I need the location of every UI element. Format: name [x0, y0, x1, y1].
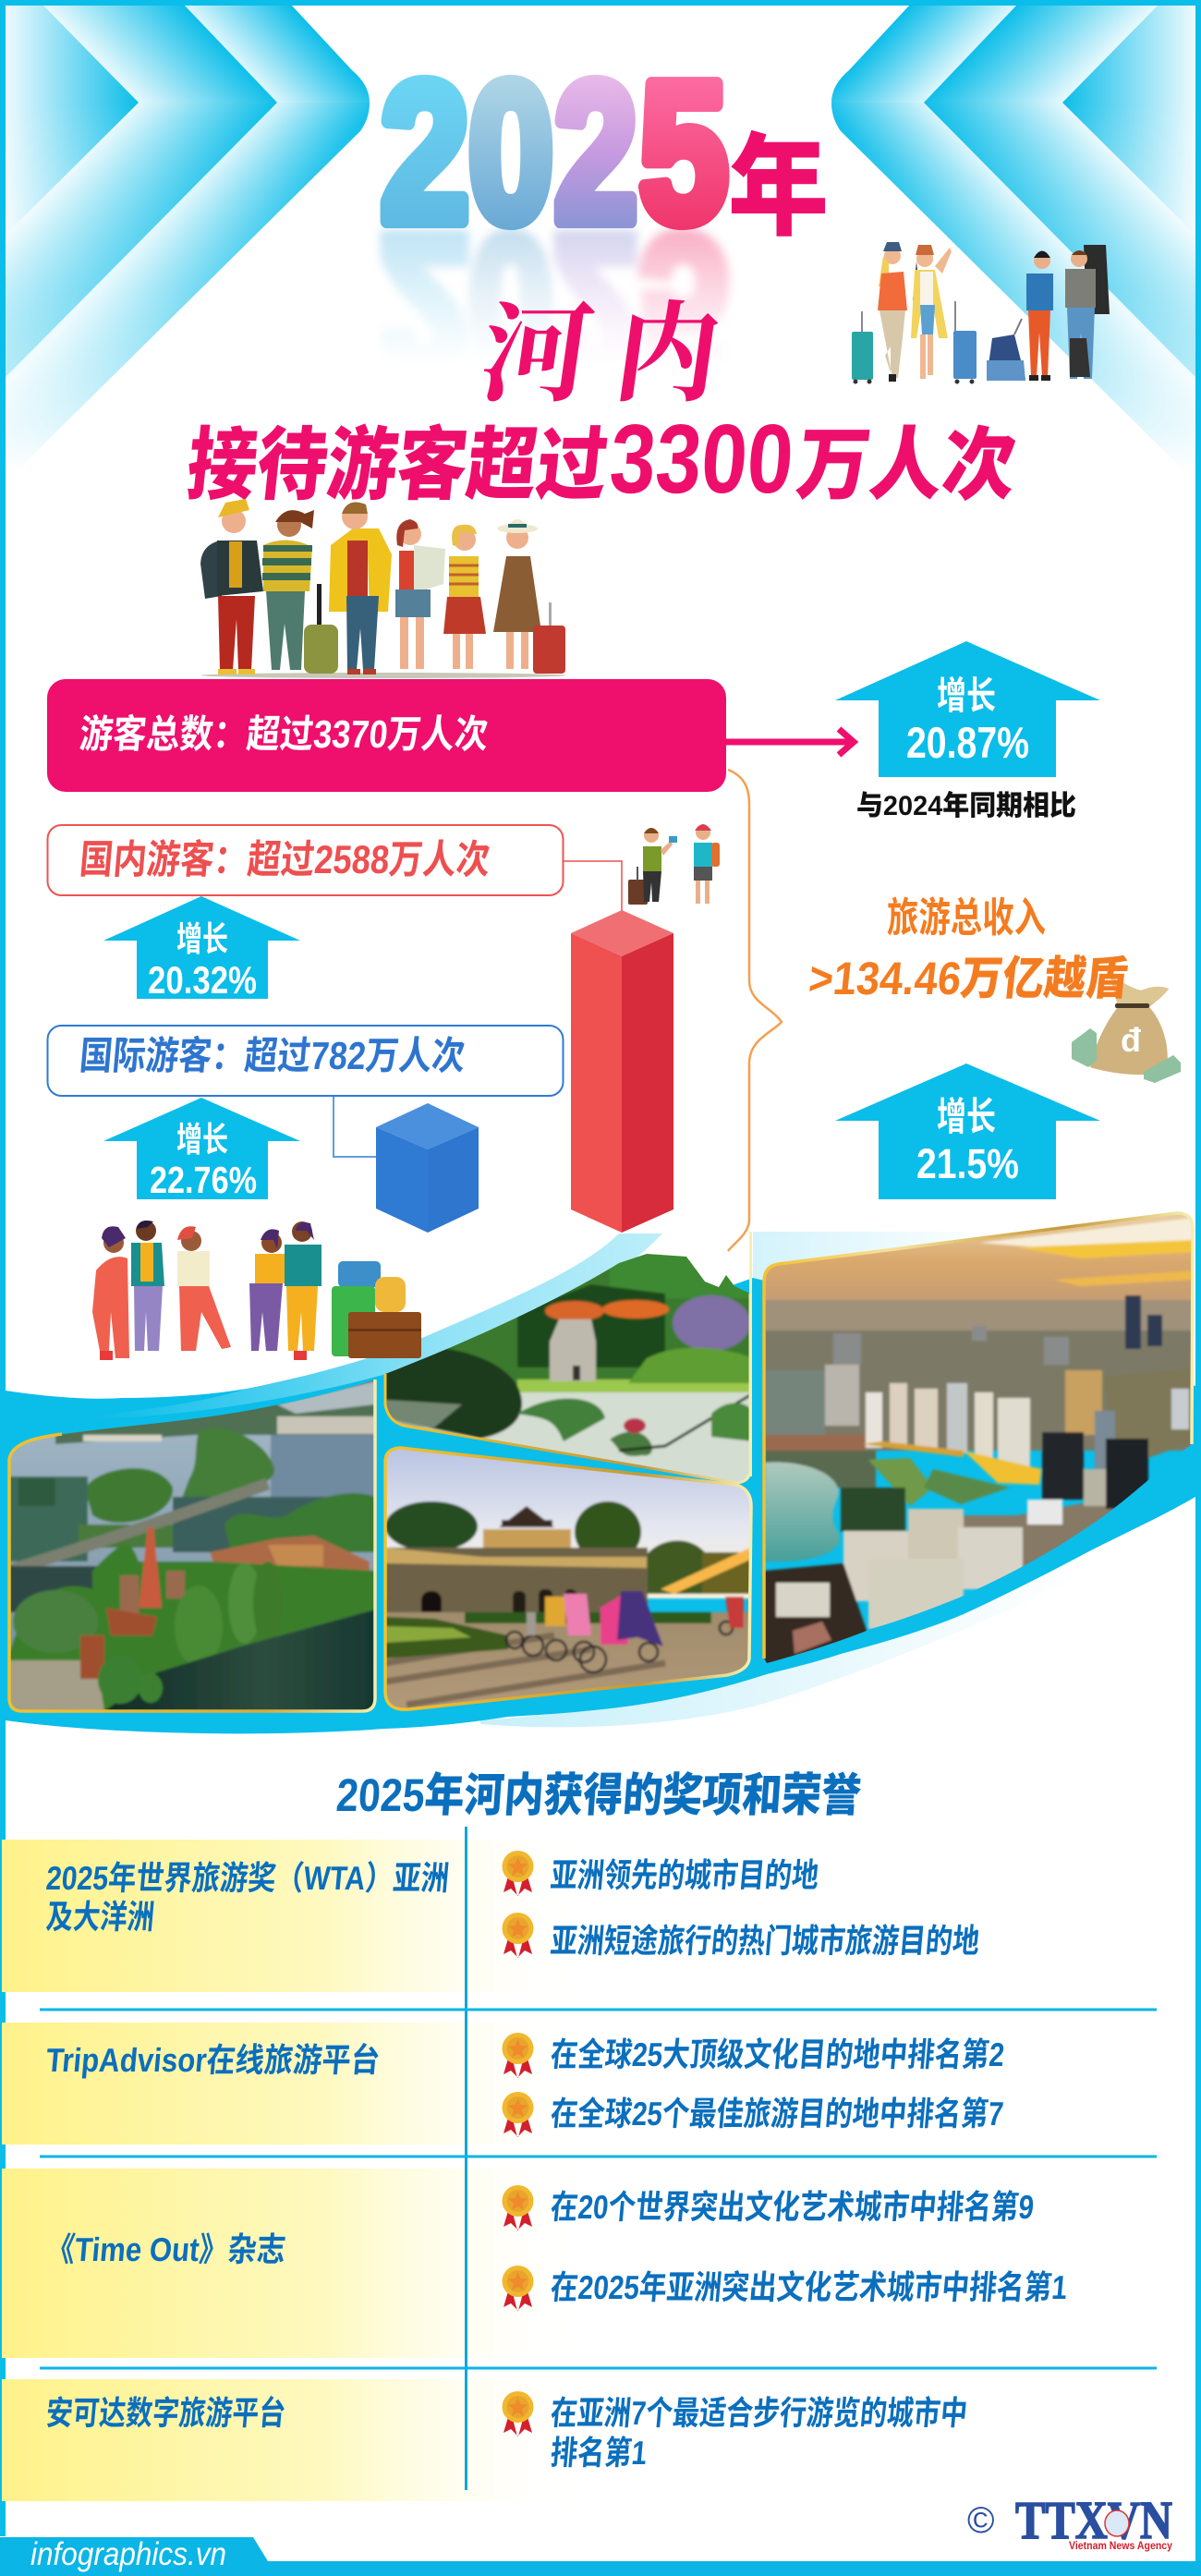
logo TTXVN: TTXVN	[1015, 2490, 1172, 2550]
photo: Tran Quoc pagoda on West Lake	[7, 1377, 377, 1714]
panel: domestic visitors	[48, 825, 564, 895]
connector blue	[334, 1096, 376, 1157]
growth arrow: international	[103, 1098, 300, 1201]
growth arrow: total visitors: 增长	[937, 674, 996, 717]
illustration: two tourists	[628, 824, 720, 905]
chevron decoration left	[6, 5, 370, 482]
awards heading: 2025年河内获得的奖项和荣誉	[334, 1769, 863, 1821]
comparison note: 与2024年同期相比	[856, 791, 1076, 821]
pale swoosh upper	[49, 1233, 662, 1419]
pale swoosh lower	[480, 1497, 1195, 1727]
title year 2025: 5	[639, 41, 728, 263]
main headline: 万人次	[793, 421, 1020, 510]
yellow row backgrounds	[2, 1840, 593, 2501]
award row 4: 排名第1	[549, 2434, 649, 2472]
revenue label: 旅游总收入	[887, 895, 1046, 941]
title year 2025: 2	[554, 41, 637, 263]
icon: money bag	[1072, 978, 1181, 1083]
growth arrow: domestic: 增长	[176, 920, 228, 958]
title Hanoi calligraphy: 河	[472, 267, 603, 423]
award row 2: 在全球25个最佳旅游目的地中排名第7	[549, 2095, 1005, 2132]
award row 3: 《Time Out》杂志	[44, 2230, 287, 2268]
reflection of the year: 2	[554, 195, 637, 418]
table column divider	[465, 1827, 467, 2490]
photo: Thang Long citadel with cyclists	[383, 1446, 753, 1719]
bar: international cube	[376, 1103, 479, 1233]
title year 2025: 0	[468, 41, 553, 263]
blue swoosh band	[6, 1278, 1195, 1733]
panel: total visitors	[47, 679, 726, 792]
growth arrow: international: 增长	[176, 1121, 228, 1159]
title Hanoi calligraphy: 内	[607, 267, 731, 423]
growth arrow: international: 22.76%	[150, 1159, 257, 1201]
award row 1: 2025年世界旅游奖（WTA）亚洲	[44, 1859, 451, 1897]
reflection of the year: 5	[639, 195, 728, 418]
award row 2: TripAdvisor在线旅游平台	[44, 2041, 382, 2079]
icon: money bag: đ	[1121, 1021, 1141, 1059]
growth arrow: domestic: 20.32%	[148, 958, 257, 1002]
illustration: tourists with luggage	[92, 1221, 421, 1360]
panel: domestic visitors: 国内游客：超过2588万人次	[78, 838, 491, 882]
footer source: infographics.vn	[30, 2536, 226, 2572]
panel: international visitors	[48, 1026, 564, 1096]
reflection of the year: 0	[468, 195, 553, 418]
award row 1	[44, 1851, 981, 1960]
growth arrow: revenue: 21.5%	[916, 1140, 1019, 1187]
pale vertical line right of the centre photos	[749, 1232, 752, 1476]
award row 2	[44, 2033, 1006, 2137]
photo: Turtle Tower on Hoan Kiem Lake	[383, 1238, 753, 1488]
title year 2025: 2	[381, 41, 469, 263]
table row dividers	[40, 2010, 1157, 2368]
growth arrow: revenue: 增长	[937, 1095, 996, 1138]
panel: total visitors: 游客总数：超过3370万人次	[78, 712, 490, 756]
award row 1: 亚洲领先的城市目的地	[549, 1856, 820, 1894]
award row 4	[44, 2391, 969, 2472]
growth arrow: revenue	[835, 1063, 1100, 1199]
award row 1: 亚洲短途旅行的热门城市旅游目的地	[549, 1922, 981, 1960]
main headline	[183, 405, 1020, 514]
copyright symbol: ©	[967, 2500, 994, 2541]
title year 2025	[381, 41, 728, 263]
chevron decoration right	[831, 5, 1195, 482]
arrow: total to growth	[726, 729, 854, 755]
main headline: 接待游客超过	[183, 421, 612, 510]
award row 3	[44, 2185, 1069, 2311]
illustration: travellers top right	[852, 242, 1110, 384]
award row 4: 安可达数字旅游平台	[44, 2394, 287, 2432]
panel: international visitors: 国际游客：超过782万人次	[78, 1034, 467, 1077]
revenue figure: >134.46万亿越盾	[807, 953, 1131, 1004]
connector lines	[564, 861, 622, 933]
bar: domestic column	[571, 910, 673, 1233]
title character year: 年	[728, 126, 829, 249]
main headline: 3300	[606, 405, 797, 514]
photo: Hanoi skyline	[762, 1210, 1196, 1668]
title Hanoi calligraphy	[472, 267, 731, 423]
footer band	[0, 2537, 1201, 2576]
growth arrow: domestic	[103, 896, 300, 1002]
award row 2: 在全球25大顶级文化目的地中排名第2	[549, 2035, 1006, 2073]
pale backdrop behind skyline photo	[753, 1232, 1002, 1280]
revenue bracket	[728, 770, 782, 1251]
award row 1: 及大洋洲	[44, 1898, 156, 1936]
growth arrow: total visitors	[835, 641, 1100, 777]
growth arrow: total visitors: 20.87%	[906, 718, 1029, 767]
award row 3: 在2025年亚洲突出文化艺术城市中排名第1	[549, 2268, 1069, 2306]
logo TTXVN: Vietnam News Agency	[1069, 2541, 1173, 2552]
award row 3: 在20个世界突出文化艺术城市中排名第9	[549, 2188, 1036, 2226]
reflection of the year: 2	[381, 195, 469, 418]
illustration: traveller group	[200, 499, 566, 678]
award row 4: 在亚洲7个最适合步行游览的城市中	[549, 2394, 969, 2432]
reflection of the year	[375, 226, 734, 347]
